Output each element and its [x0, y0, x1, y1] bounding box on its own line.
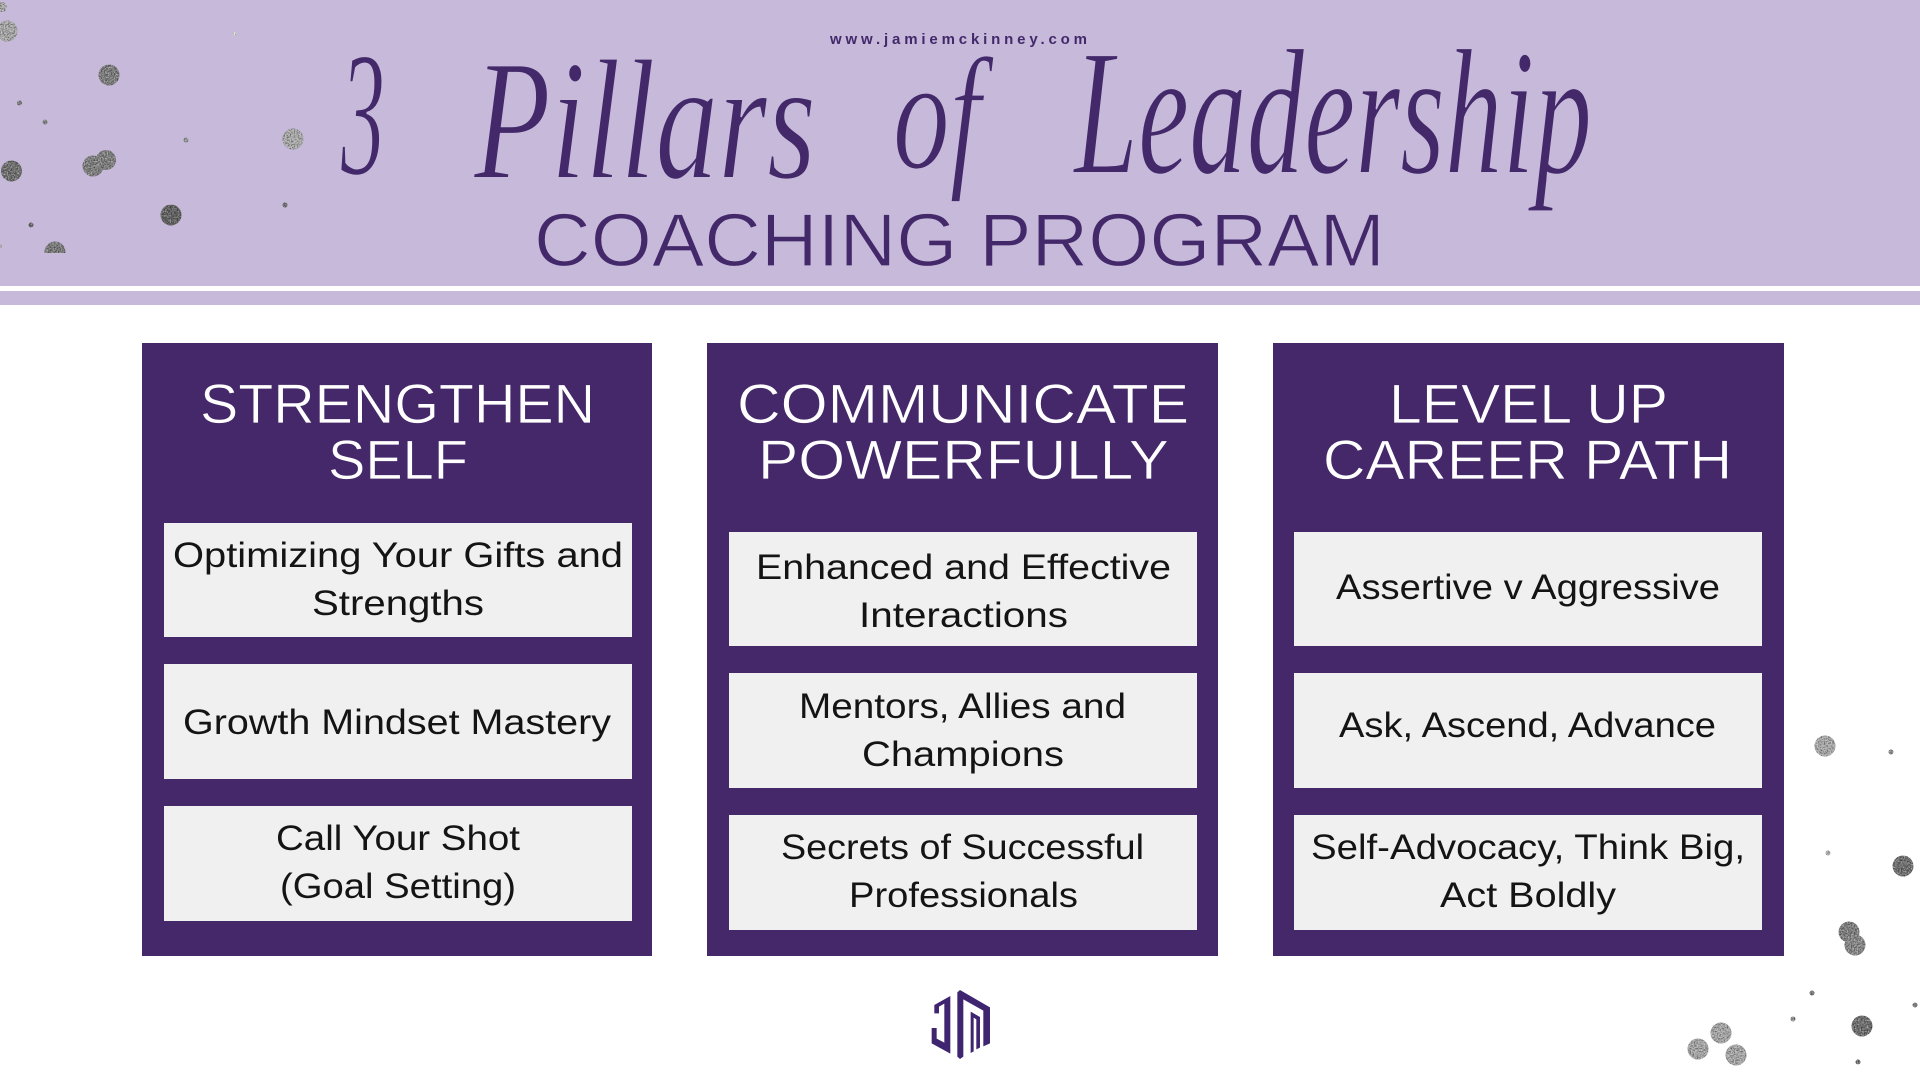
heading: level up career path — [1323, 372, 1732, 491]
silver dots: top left — [0, 2, 304, 262]
heading: strengthen self: SELF — [328, 428, 468, 491]
panel background — [1273, 343, 1784, 956]
panel background — [707, 343, 1218, 956]
item: assertive v aggressive — [1294, 532, 1762, 646]
heading: level up career path: LEVEL UP — [1389, 372, 1668, 435]
heading: communicate powerfully — [737, 372, 1189, 491]
title: 3 Pillars of Leadership: Pillars — [473, 26, 816, 216]
item: optimizing your gifts and strengths: Optimizing Your Gifts and — [173, 536, 623, 575]
item: secrets of successful professionals: Secrets of Successful — [781, 828, 1144, 867]
item: call your shot: (Goal Setting) — [280, 867, 516, 906]
panel: strengthen self — [142, 343, 652, 956]
heading: strengthen self — [200, 372, 595, 491]
title: 3 Pillars of Leadership — [341, 13, 1592, 216]
header band — [0, 0, 1920, 286]
heading: communicate powerfully: POWERFULLY — [758, 428, 1169, 491]
website url: www.jamiemckinney.com — [829, 31, 1087, 48]
item: call your shot: Call Your Shot — [276, 819, 520, 858]
heading: level up career path: CAREER PATH — [1323, 428, 1732, 491]
panel: level up career path — [1273, 343, 1784, 956]
item: secrets of successful professionals — [729, 815, 1197, 930]
heading: communicate powerfully: COMMUNICATE — [737, 372, 1189, 435]
item: growth mindset mastery: Growth Mindset Mastery — [183, 703, 612, 742]
item: assertive v aggressive: Assertive v Aggressive — [1336, 568, 1720, 607]
title: 3 Pillars of Leadership: of — [893, 25, 994, 203]
panel: communicate powerfully — [707, 343, 1218, 956]
item: enhanced and effective interactions: Enhanced and Effective — [756, 548, 1171, 587]
item: optimizing your gifts and strengths — [164, 523, 632, 637]
item: self-advocacy, think big, act boldly: Self-Advocacy, Think Big, — [1311, 828, 1745, 867]
item: secrets of successful professionals: Professionals — [849, 876, 1078, 915]
item: enhanced and effective interactions — [729, 532, 1197, 646]
header stripe — [0, 291, 1920, 305]
title: 3 Pillars of Leadership: 3 — [341, 15, 385, 213]
heading: strengthen self: STRENGTHEN — [200, 372, 595, 435]
item: self-advocacy, think big, act boldly: Act Boldly — [1440, 876, 1617, 915]
item: mentors, allies and champions: Mentors, Allies and — [799, 687, 1126, 726]
item: mentors, allies and champions — [729, 673, 1197, 788]
item: mentors, allies and champions: Champions — [862, 735, 1064, 774]
item: growth mindset mastery — [164, 664, 632, 779]
item: self-advocacy, think big, act boldly — [1294, 815, 1762, 930]
subtitle: coaching program: COACHING PROGRAM — [534, 198, 1385, 282]
item: ask, ascend, advance: Ask, Ascend, Advance — [1339, 706, 1716, 745]
silver dots: bottom right — [1688, 736, 1918, 1066]
icon: JM logo — [932, 990, 990, 1059]
title: 3 Pillars of Leadership: Leadership — [1072, 13, 1592, 212]
panel background — [142, 343, 652, 956]
item: enhanced and effective interactions: Interactions — [859, 596, 1068, 635]
item: ask, ascend, advance — [1294, 673, 1762, 788]
item: call your shot — [164, 806, 632, 921]
item: optimizing your gifts and strengths: Strengths — [312, 584, 484, 623]
